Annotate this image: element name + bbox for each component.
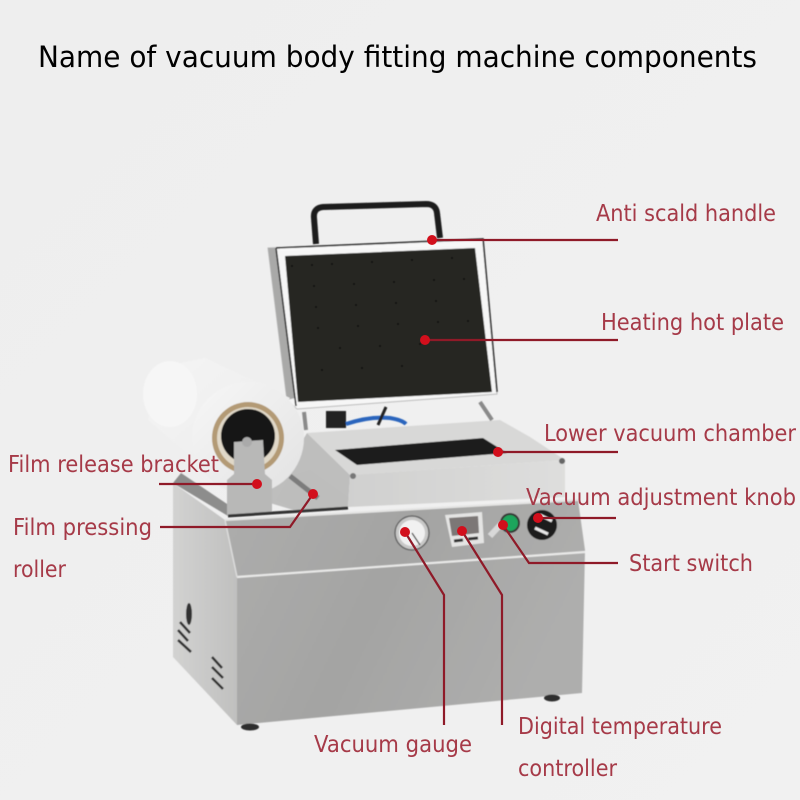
film roll — [143, 358, 304, 494]
callout: film pressing roller: Film pressing — [13, 515, 152, 541]
callout: heating hot plate: Heating hot plate — [601, 310, 784, 336]
callout: digital temperature controller: controller — [518, 756, 617, 782]
callout: vacuum gauge: Vacuum gauge — [314, 732, 472, 758]
callout: vacuum adjustment knob — [526, 485, 796, 523]
hot plate — [285, 248, 492, 402]
callout: digital temperature controller — [457, 526, 722, 782]
callout: start switch — [498, 520, 753, 577]
handle — [314, 204, 440, 244]
film pressing roller — [228, 470, 348, 516]
callout: film release bracket — [8, 452, 262, 489]
heating lid — [268, 239, 497, 409]
vacuum body fitting machine — [143, 204, 585, 730]
vacuum adjustment knob — [527, 510, 557, 540]
callout: lower vacuum chamber — [493, 421, 796, 457]
callout: film pressing roller: roller — [13, 557, 66, 583]
machine base: side panel — [173, 483, 237, 725]
digital temperature controller — [445, 512, 484, 547]
callout: anti scald handle: Anti scald handle — [596, 201, 776, 227]
vacuum chamber — [260, 420, 565, 512]
callout: vacuum gauge — [314, 527, 472, 758]
machine base: front panel — [225, 500, 585, 730]
start switch — [490, 513, 520, 536]
blue air hose and hinges — [304, 402, 492, 430]
film release bracket — [173, 437, 272, 516]
callout: film pressing roller — [13, 489, 318, 583]
callout: start switch: Start switch — [629, 551, 753, 577]
title: Name of vacuum body fitting machine components — [38, 40, 757, 74]
callout: digital temperature controller: Digital temperature — [518, 714, 722, 740]
callout: heating hot plate — [420, 310, 784, 345]
callout: film release bracket: Film release bracket — [8, 452, 219, 478]
vacuum gauge — [395, 516, 429, 550]
callout: anti scald handle — [427, 201, 776, 245]
